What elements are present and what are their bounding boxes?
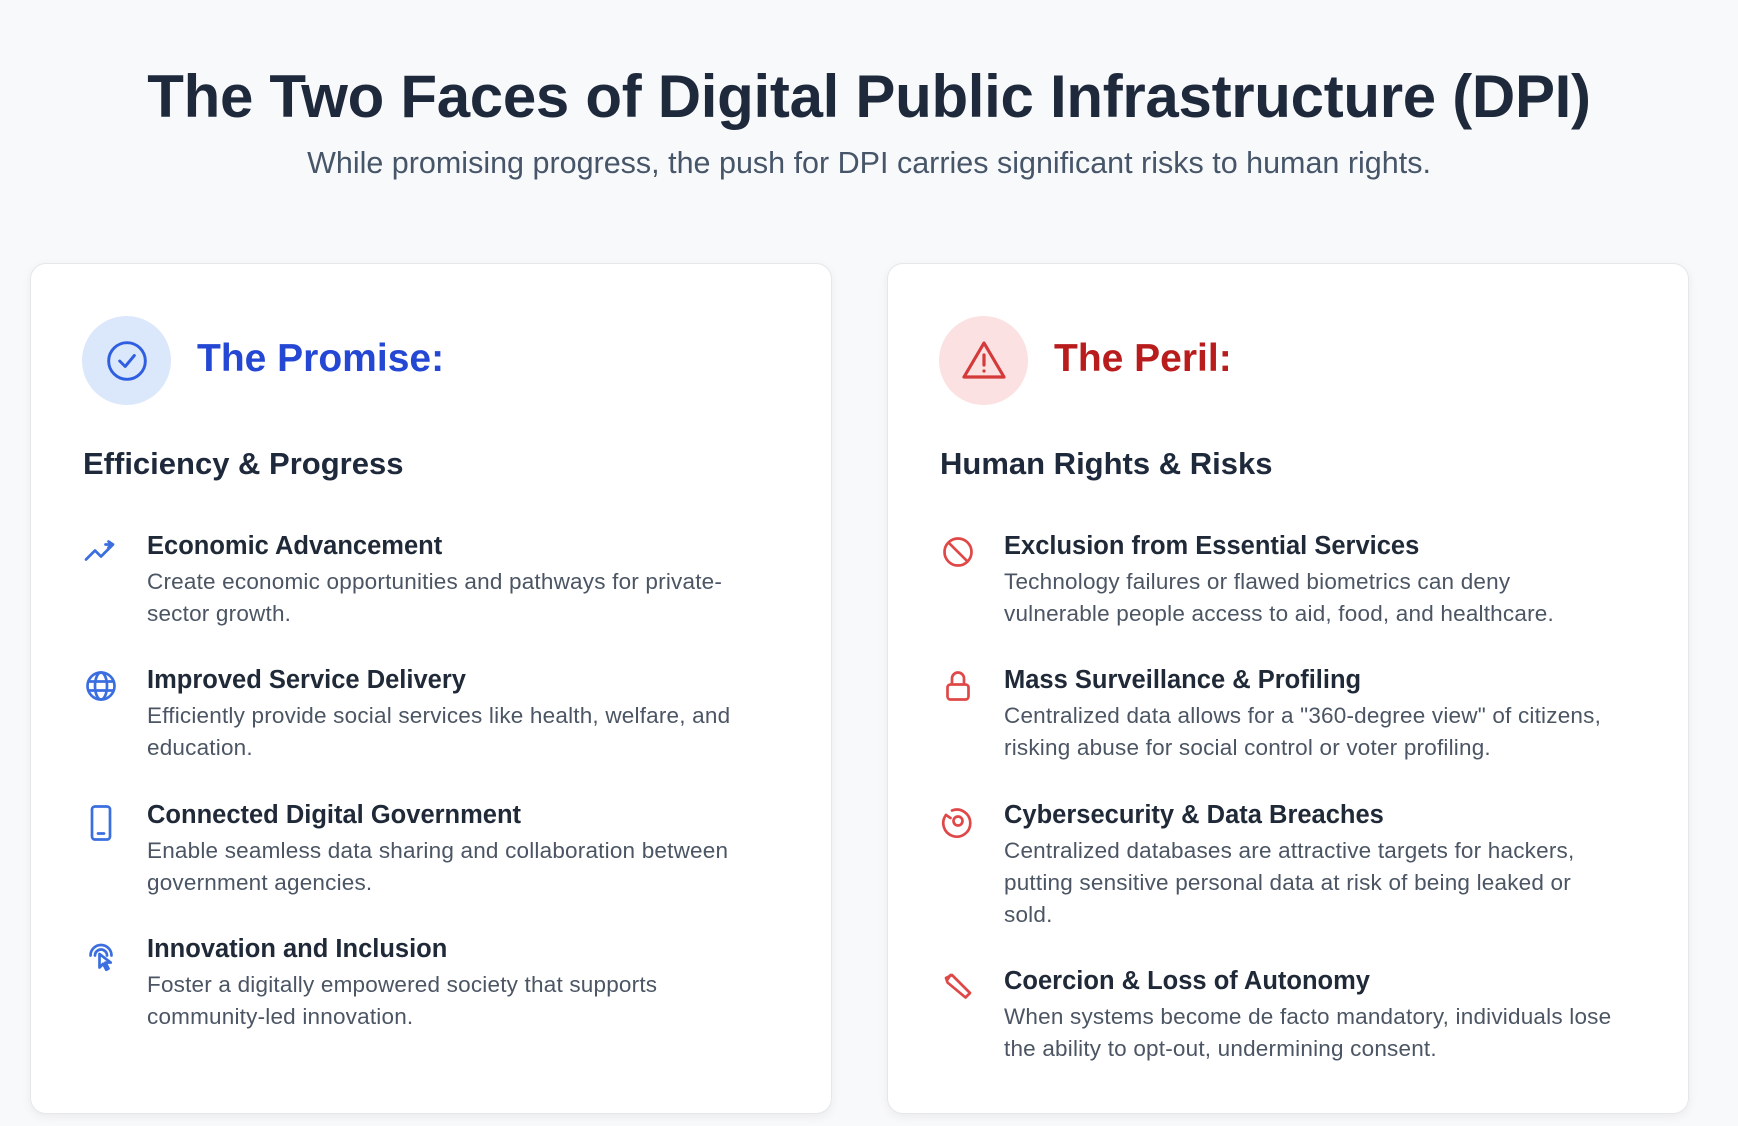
item: service delivery xyxy=(86,666,730,760)
item: innovation xyxy=(89,935,657,1029)
panel: peril: vulnerable people access to aid, food, and healthcare. xyxy=(1004,601,1554,626)
panel: promise: education. xyxy=(147,735,253,760)
icon: warning xyxy=(939,316,1028,405)
panel: peril: sold. xyxy=(1004,902,1053,927)
panel: promise: Enable seamless data sharing and collaboration between xyxy=(147,838,728,863)
panel: promise: government agencies. xyxy=(147,870,372,895)
item: economic xyxy=(84,532,722,626)
panel: peril: putting sensitive personal data at risk of being leaked or xyxy=(1004,870,1571,895)
heading: the promise: The Promise: xyxy=(197,337,444,380)
title: The Two Faces of Digital Public Infrastructure (DPI) xyxy=(147,63,1591,130)
panel: promise: Improved Service Delivery xyxy=(147,666,466,694)
panel: promise xyxy=(30,263,832,1114)
panel: peril: Centralized data allows for a "360-degree view" of citizens, xyxy=(1004,703,1601,728)
panel: peril: the ability to opt-out, undermining consent. xyxy=(1004,1036,1437,1061)
panel: promise: Efficiently provide social services like health, welfare, and xyxy=(147,703,730,728)
subheading: Efficiency & Progress xyxy=(83,446,403,481)
panel: peril: Coercion & Loss of Autonomy xyxy=(1004,967,1370,995)
panel: promise: sector growth. xyxy=(147,601,291,626)
panel: peril: Technology failures or flawed biometrics can deny xyxy=(1004,569,1510,594)
panel: peril: Centralized databases are attractive targets for hackers, xyxy=(1004,838,1574,863)
item: cybersecurity xyxy=(942,801,1574,927)
icon: check circle xyxy=(82,316,171,405)
item: connected gov xyxy=(90,801,728,895)
panel: peril xyxy=(887,263,1689,1114)
panel: promise: Create economic opportunities and pathways for private- xyxy=(147,569,722,594)
subtitle: While promising progress, the push for DPI carries significant risks to human rights. xyxy=(307,146,1431,180)
panel: promise: Innovation and Inclusion xyxy=(147,935,447,963)
item: exclusion xyxy=(943,532,1554,626)
item: surveillance xyxy=(946,666,1601,760)
panel: peril: Mass Surveillance & Profiling xyxy=(1004,666,1361,694)
panel: promise: community-led innovation. xyxy=(147,1004,413,1029)
item: coercion xyxy=(944,967,1611,1061)
panel: peril: Cybersecurity & Data Breaches xyxy=(1004,801,1384,829)
panel: peril: Exclusion from Essential Services xyxy=(1004,532,1419,560)
heading: the peril: The Peril: xyxy=(1054,337,1232,380)
subheading: Human Rights & Risks xyxy=(940,446,1272,481)
panel: promise: Foster a digitally empowered society that supports xyxy=(147,972,657,997)
panel: peril: When systems become de facto mandatory, individuals lose xyxy=(1004,1004,1611,1029)
panel: promise: Economic Advancement xyxy=(147,532,442,560)
panel: peril: risking abuse for social control or voter profiling. xyxy=(1004,735,1491,760)
panel: promise: Connected Digital Government xyxy=(147,801,521,829)
